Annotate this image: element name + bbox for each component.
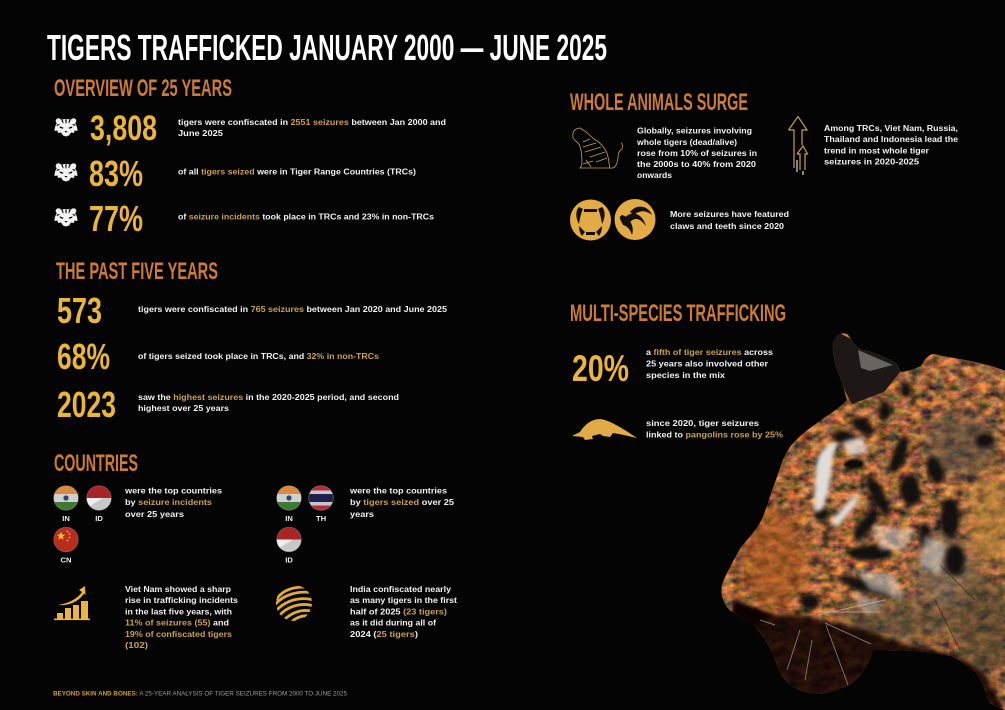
text: top countries by seizure incidents: over 25 years (125, 509, 184, 519)
label: TH: TH (316, 514, 326, 523)
text: top countries by seizure incidents (124, 486, 222, 519)
whiskers (760, 565, 975, 685)
text: Viet Nam: in the last five years, with (125, 606, 232, 616)
text: 573 description: tigers were confiscated in 765 seizures between Jan 2020 and June 2025 (138, 304, 447, 314)
text: Viet Nam: Viet Nam showed a sharp (125, 584, 231, 594)
panel: countries (53, 450, 457, 650)
ear (833, 334, 900, 404)
icon: tiger stripe fingerprint (276, 586, 312, 621)
text: top countries by seizure incidents: by seizure incidents (125, 497, 212, 507)
text: globally: rose from 10% of seizures in (637, 148, 757, 158)
icon: claws (614, 199, 656, 240)
text: top countries by tigers seized: were the top countries (349, 486, 447, 496)
text: fifth of seizures (646, 347, 773, 380)
text: pangolins (646, 418, 783, 440)
text: top countries by seizure incidents: were the top countries (124, 486, 222, 496)
icon: rising bar chart (54, 586, 90, 620)
text: Viet Nam: 19% of confiscated tigers (125, 629, 232, 639)
heading: overview: OVERVIEW OF 25 YEARS (54, 75, 232, 102)
stat: 68%: 68% (57, 336, 110, 377)
text: among TRCs: Thailand and Indonesia lead the (824, 134, 958, 144)
text: 83% description: of all tigers seized were in Tiger Range Countries (TRCs) (178, 166, 416, 176)
text: India: as it did during all of (350, 618, 436, 628)
label: ID: ID (285, 556, 293, 564)
text: pangolins: linked to pangolins rose by 25% (646, 430, 783, 440)
text: 3,808 description (178, 117, 446, 138)
icon: tiger face 1 (54, 118, 78, 136)
text: claws and teeth (670, 209, 789, 231)
stat: 77%: 77% (89, 198, 143, 239)
text: top countries by tigers seized (349, 486, 454, 519)
text: 2023 description: saw the highest seizures in the 2020-2025 period, and second (138, 392, 399, 402)
text: India: India confiscated nearly (350, 584, 451, 594)
flag: Indonesia (276, 526, 302, 552)
chin shade (715, 615, 1005, 710)
text: globally: onwards (637, 170, 672, 180)
text: fifth of seizures: 25 years also involved other (646, 358, 769, 368)
text: globally: the 2000s to 40% from 2020 (637, 159, 756, 169)
stat: 573: 573 (57, 290, 102, 331)
icon: tiger face 3 (54, 208, 78, 226)
text: pangolins: since 2020, tiger seizures (646, 418, 759, 428)
panel: whole animals surge (570, 89, 958, 240)
flag: India (276, 485, 302, 511)
label: IN: IN (285, 514, 293, 523)
flag: Thailand (308, 485, 334, 511)
text: India: as many tigers in the first (350, 595, 457, 605)
flag: Indonesia (86, 485, 112, 511)
eye (844, 459, 864, 469)
title: TIGERS TRAFFICKED JANUARY 2000 — JUNE 2025 (47, 27, 607, 68)
text: among TRCs (824, 123, 958, 166)
stat: 20%: 20% (572, 348, 629, 389)
text: among TRCs: seizures in 2020-2025 (824, 156, 919, 166)
heading: past five years: THE PAST FIVE YEARS (56, 258, 218, 285)
heading: multi-species: MULTI-SPECIES TRAFFICKING (570, 300, 786, 327)
icon: seated tiger outline (573, 128, 622, 168)
text: India: half of 2025 (23 tigers) (350, 606, 447, 616)
text: fifth of seizures: a fifth of tiger seizures across (646, 347, 773, 357)
text: among TRCs: trend in most whole tiger (824, 146, 930, 156)
label: CN: CN (61, 556, 71, 564)
text: 3,808 description: June 2025 (178, 128, 223, 138)
text: globally: Globally, seizures involving (637, 126, 752, 136)
text: top countries by tigers seized: years (350, 509, 374, 519)
panel: overview of 25 years (54, 75, 446, 239)
text: Viet Nam: rise in trafficking incidents (125, 595, 238, 605)
label: IN: IN (62, 514, 70, 523)
text: Viet Nam: (102) (125, 640, 148, 650)
text: 2023 description: highest over 25 years (138, 403, 229, 413)
text: among TRCs: Among TRCs, Viet Nam, Russia, (824, 123, 958, 133)
text: globally: whole tigers (dead/alive) (636, 137, 737, 147)
pale fur (814, 437, 945, 615)
text: Viet Nam: 11% of seizures (55) and (125, 618, 229, 628)
stat: 83%: 83% (89, 153, 143, 194)
text: 77% description: of seizure incidents took place in TRCs and 23% in non-TRCs (178, 212, 434, 222)
footer: BEYOND SKIN AND BONES: A 25-YEAR ANALYSIS OF TIGER SEIZURES FROM 2000 TO JUNE 2025 (53, 690, 348, 698)
icon: pangolin (572, 419, 637, 440)
flag: India (53, 485, 79, 511)
image: mosaic tiger head (715, 325, 1005, 710)
panel: the past five years (56, 258, 447, 425)
label: ID: ID (95, 514, 103, 523)
heading: countries: COUNTRIES (54, 450, 138, 477)
text: fifth of seizures: species in the mix (646, 370, 725, 380)
icon: tiger face 2 (54, 163, 78, 182)
text: globally (636, 126, 757, 180)
panel: multi-species trafficking (570, 300, 786, 440)
flag: China (54, 527, 78, 552)
text: India: 2024 (25 tigers ) (350, 629, 418, 639)
stat: 2023: 2023 (57, 384, 116, 425)
text: 68% description: of tigers seized took place in TRCs, and 32% in non-TRCs (138, 351, 379, 361)
stat: 3,808: 3,808 (90, 109, 157, 148)
text: Viet Nam (125, 584, 238, 650)
text: India (350, 584, 457, 639)
text: top countries by tigers seized: by tigers seized over 25 (350, 497, 454, 507)
text: claws and teeth: More seizures have featured (670, 209, 789, 219)
text: 2023 description (138, 392, 399, 413)
text: 3,808 description: tigers were confiscated in 2551 seizures between Jan 2000 and (178, 117, 446, 127)
text: claws and teeth: claws and teeth since 2020 (670, 221, 784, 231)
heading: whole animals surge: WHOLE ANIMALS SURGE (570, 89, 748, 116)
icon: rising arrows (788, 116, 808, 175)
icon: teeth (570, 200, 611, 240)
